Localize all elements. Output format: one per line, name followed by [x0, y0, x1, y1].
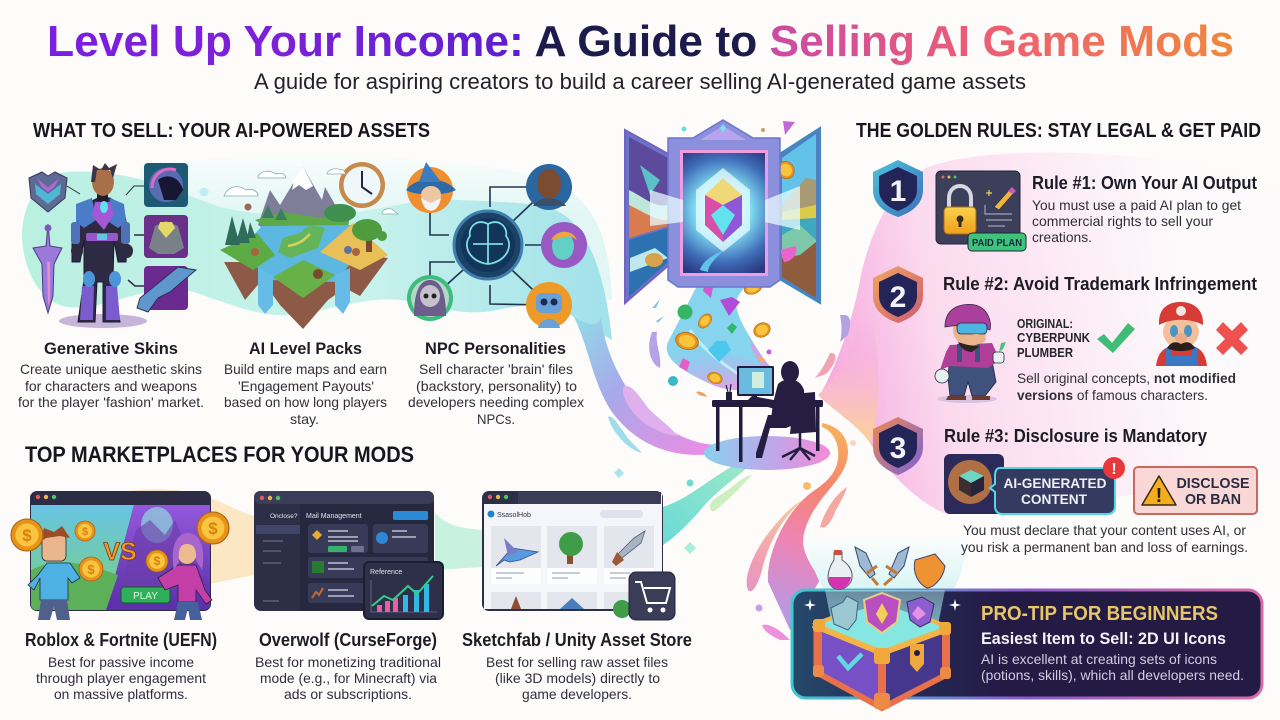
card: Sketchfab and Unity [462, 630, 692, 702]
card: AI level packs: Build entire maps and earn [224, 361, 387, 377]
card: generative skins [18, 339, 204, 410]
original concept label: ORIGINAL: [1017, 316, 1073, 331]
icon: red cross [1216, 322, 1248, 355]
badge: AI generated content: CONTENT [1021, 491, 1087, 507]
illustration: Roblox and Fortnite window: $ [154, 554, 161, 568]
icon: lock window with paid plan badge: PAID PLAN [972, 237, 1022, 249]
portal left panel [625, 130, 670, 303]
original concept label: PLUMBER [1017, 345, 1074, 360]
card: Overwolf: mode (e.g., for Minecraft) via [260, 670, 437, 686]
card: Roblox and Fortnite: Roblox & Fortnite (UEFN) [25, 630, 217, 650]
pro-tip text: Easiest Item to Sell: 2D UI Icons [981, 629, 1226, 648]
card: Roblox and Fortnite: on massive platforms. [54, 686, 188, 702]
illustration: famous plumber [1156, 302, 1207, 366]
rule 3 text: You must declare that your content uses AI, or [963, 522, 1246, 538]
icon: shield 1 [873, 160, 923, 217]
card: AI level packs: based on how long players [224, 394, 387, 410]
badge: AI generated content [944, 454, 1125, 514]
illustration: cyberpunk plumber [935, 304, 1006, 403]
portal right panel [775, 128, 820, 303]
pro-tip text: PRO-TIP FOR BEGINNERS [981, 603, 1218, 625]
card: NPC personalities: developers needing complex [408, 394, 584, 410]
panel: what to sell [18, 120, 587, 427]
icon: shield 3 [873, 417, 923, 475]
icon: shield 2 [873, 266, 923, 323]
card: Overwolf: Best for monetizing traditional [255, 654, 441, 670]
illustration: Overwolf dashboard window [254, 491, 443, 619]
illustration: Roblox and Fortnite window: $ [208, 519, 218, 538]
card: Roblox and Fortnite: through player engagement [36, 670, 206, 686]
badge: disclose or ban: DISCLOSE [1176, 475, 1250, 492]
original concept label [1017, 316, 1091, 360]
illustration: Overwolf dashboard window: Onclose? [270, 513, 298, 520]
original concept label: CYBERPUNK [1017, 330, 1091, 345]
illustration: Sketchfab asset store window [482, 491, 675, 620]
illustration: Overwolf dashboard window: Mail Management [306, 513, 362, 520]
rule 1 text [1032, 173, 1257, 245]
card: NPC personalities: Sell character 'brain' files [419, 361, 573, 377]
badge: disclose or ban: ! [1156, 485, 1162, 507]
badge: disclose or ban: OR BAN [1185, 491, 1241, 508]
card: AI level packs: 'Engagement Payouts' [238, 378, 374, 394]
chest walls [882, 628, 950, 710]
pro-tip text [981, 603, 1244, 683]
creator at desk [704, 361, 830, 470]
panel: marketplaces [11, 442, 692, 702]
card: Sketchfab and Unity: Sketchfab / Unity Asset Store [462, 630, 692, 650]
illustration: Roblox and Fortnite window: VS [103, 538, 137, 566]
card: Overwolf: ads or subscriptions. [284, 686, 412, 702]
icon: shield 3: 3 [890, 432, 906, 465]
rule 3 heading: Rule #3: Disclosure is Mandatory [944, 426, 1207, 446]
badge: AI generated content: ! [1111, 461, 1117, 478]
rule 2 block [873, 266, 1257, 403]
illustration: Roblox and Fortnite window: $ [87, 562, 95, 577]
title: Level Up Your Income: A Guide to Selling AI Game Mods [47, 17, 1234, 66]
portal center frame [650, 120, 800, 287]
rule 1 text: Rule #1: Own Your AI Output [1032, 173, 1257, 193]
pro-tip text: (potions, skills), which all developers need. [981, 667, 1244, 683]
card: AI level packs: AI Level Packs [249, 339, 362, 358]
pro-tip text: AI is excellent at creating sets of icons [981, 651, 1217, 667]
callout: pro-tip [792, 547, 1262, 710]
illustration: Roblox and Fortnite window: $ [82, 526, 88, 538]
illustration: Overwolf dashboard window: Reference [370, 569, 402, 576]
subtitle: A guide for aspiring creators to build a career selling AI-generated game assets [254, 69, 1026, 94]
rule 1 text: commercial rights to sell your [1032, 213, 1213, 229]
rule 2 heading: Rule #2: Avoid Trademark Infringement [943, 274, 1257, 294]
card: Overwolf: Overwolf (CurseForge) [259, 630, 437, 650]
card: AI level packs [224, 339, 387, 427]
rule 3 text: you risk a permanent ban and loss of earnings. [961, 539, 1248, 555]
rule 2 text [1017, 370, 1236, 403]
illustration: Sketchfab asset store window: SsasolHob [497, 512, 531, 519]
icon: lock window with paid plan badge [936, 171, 1026, 251]
rule 2 text: versions of famous characters. [1017, 387, 1208, 403]
card: Overwolf [255, 630, 441, 702]
card: Sketchfab and Unity: Best for selling raw asset files [486, 654, 668, 670]
card: NPC personalities: NPCs. [477, 411, 515, 427]
illustration: Roblox and Fortnite window: PLAY [133, 591, 158, 602]
stream of coins and gems [649, 262, 850, 397]
card: generative skins: for characters and weapons [25, 378, 197, 394]
illustration: central portal and creator [625, 120, 850, 470]
card: Roblox and Fortnite [25, 630, 217, 702]
panel: golden rules [856, 120, 1261, 555]
card: NPC personalities: NPC Personalities [425, 339, 566, 358]
card: generative skins: Create unique aesthetic skins [20, 361, 202, 377]
icon: green check [1097, 323, 1135, 353]
background flowing shapes [22, 153, 1280, 640]
rule 2 text: Sell original concepts, not modified [1017, 370, 1236, 386]
heading: marketplaces: TOP MARKETPLACES FOR YOUR MODS [25, 442, 414, 467]
rule 1 text: creations. [1032, 229, 1092, 245]
chest illustration [804, 547, 961, 710]
rule 3 block [873, 417, 1257, 555]
illustration: AI level packs island [220, 162, 398, 329]
rule 3 text [961, 522, 1248, 555]
card: generative skins: Generative Skins [44, 339, 178, 358]
illustration: NPC personalities network [406, 162, 587, 328]
card: generative skins: for the player 'fashion' market. [18, 394, 204, 410]
card: NPC personalities [408, 339, 584, 427]
badge: AI generated content: AI-GENERATED [1004, 475, 1106, 491]
card: NPC personalities: (backstory, personality) to [416, 378, 577, 394]
icon: shield 1: 1 [890, 175, 906, 208]
heading: what to sell: WHAT TO SELL: YOUR AI-POWERED ASSETS [33, 120, 430, 142]
card: AI level packs: stay. [290, 411, 319, 427]
card: Roblox and Fortnite: Best for passive income [48, 654, 194, 670]
card: Sketchfab and Unity: game developers. [522, 686, 632, 702]
rule 1 text: You must use a paid AI plan to get [1032, 197, 1241, 213]
icon: shield 2: 2 [890, 281, 906, 314]
illustration: generative skins [29, 163, 196, 328]
illustration: Roblox and Fortnite window: $ [22, 526, 32, 545]
rule 1 block [873, 160, 1257, 251]
illustration: Roblox and Fortnite window [11, 491, 229, 620]
card: Sketchfab and Unity: (like 3D models) directly to [495, 670, 660, 686]
badge: disclose or ban [1134, 467, 1257, 514]
